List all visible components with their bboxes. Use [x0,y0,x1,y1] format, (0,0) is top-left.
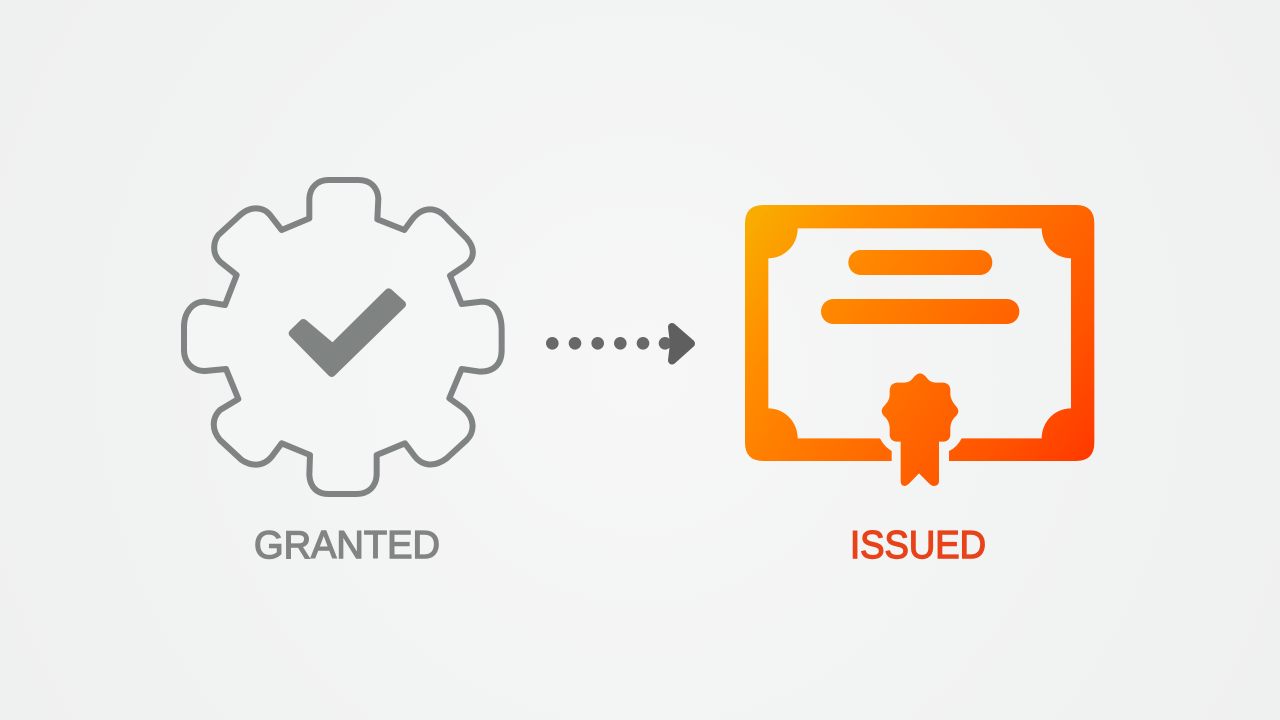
seal rosette [882,373,958,442]
icon: certificate [745,205,1094,486]
text line 2 [821,299,1019,324]
check mark [293,292,402,373]
label: issued: ISSUED [850,524,986,567]
certificate frame [745,205,1094,461]
label: granted: GRANTED [254,524,440,567]
text line 1 [848,250,992,275]
gear outline [184,180,502,494]
icon: gear with check mark [184,180,502,494]
ribbon tails [901,437,939,486]
arrow: dotted [546,327,691,360]
ribbon seal [882,373,958,486]
